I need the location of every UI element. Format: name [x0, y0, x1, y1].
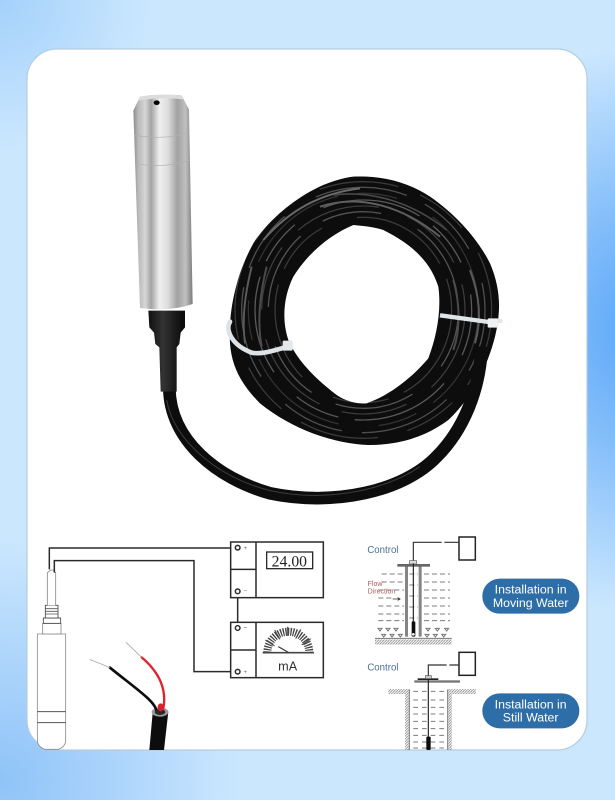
moving water diagram	[367, 537, 475, 645]
negative terminal	[235, 589, 240, 594]
left cable tie	[228, 322, 293, 353]
badge: still water	[482, 693, 579, 728]
badge: still water: Installation in	[495, 698, 567, 712]
flow direction label: Direction	[368, 589, 395, 596]
stainless sensor body	[133, 95, 193, 309]
badge: still water: Still Water	[503, 711, 559, 725]
positive terminal	[235, 545, 240, 550]
control line	[413, 542, 459, 561]
voltage reading: 24.00	[272, 553, 307, 570]
flow direction label	[368, 581, 395, 596]
badge: moving water: Installation in	[495, 582, 567, 596]
sensor connector	[148, 311, 185, 392]
wiring diagram	[37, 542, 323, 750]
negative terminal	[235, 626, 240, 630]
polarity plus: +	[243, 669, 247, 676]
polarity plus: +	[243, 545, 247, 552]
coiled cable	[230, 176, 499, 445]
flow arrow	[393, 598, 400, 600]
cable tail	[169, 347, 482, 498]
panel: white card	[27, 49, 587, 750]
control box	[459, 537, 475, 560]
control label: Control	[367, 663, 398, 674]
water dashes	[413, 691, 444, 748]
polarity minus: −	[243, 624, 247, 631]
control box	[459, 652, 475, 675]
voltage display	[267, 552, 313, 569]
well walls	[388, 689, 476, 750]
sensor line drawing	[37, 570, 66, 749]
sensor probe	[412, 563, 415, 637]
well pipe	[397, 561, 430, 637]
power supply	[231, 542, 323, 598]
cable tail highlight	[167, 400, 420, 495]
stripped cable end	[89, 642, 168, 750]
gauge scale	[263, 627, 314, 653]
gravel	[378, 628, 449, 637]
product photo: level sensor with coiled cable	[133, 95, 502, 498]
control line	[428, 665, 459, 677]
badge: moving water	[482, 579, 579, 614]
well cover	[414, 676, 460, 683]
installation diagrams	[367, 537, 579, 750]
ammeter	[231, 622, 323, 678]
wires	[49, 548, 238, 672]
still water diagram	[367, 652, 476, 750]
badge: moving water: Moving Water	[493, 596, 568, 610]
right cable tie	[440, 315, 502, 328]
control label: Control	[367, 545, 398, 556]
positive terminal	[235, 669, 240, 674]
riverbed	[375, 638, 452, 645]
sensor probe	[426, 680, 431, 750]
flow direction label: Flow	[368, 581, 383, 588]
water dashes	[378, 574, 450, 621]
unit label: mA	[278, 660, 298, 674]
polarity minus: −	[243, 588, 247, 595]
